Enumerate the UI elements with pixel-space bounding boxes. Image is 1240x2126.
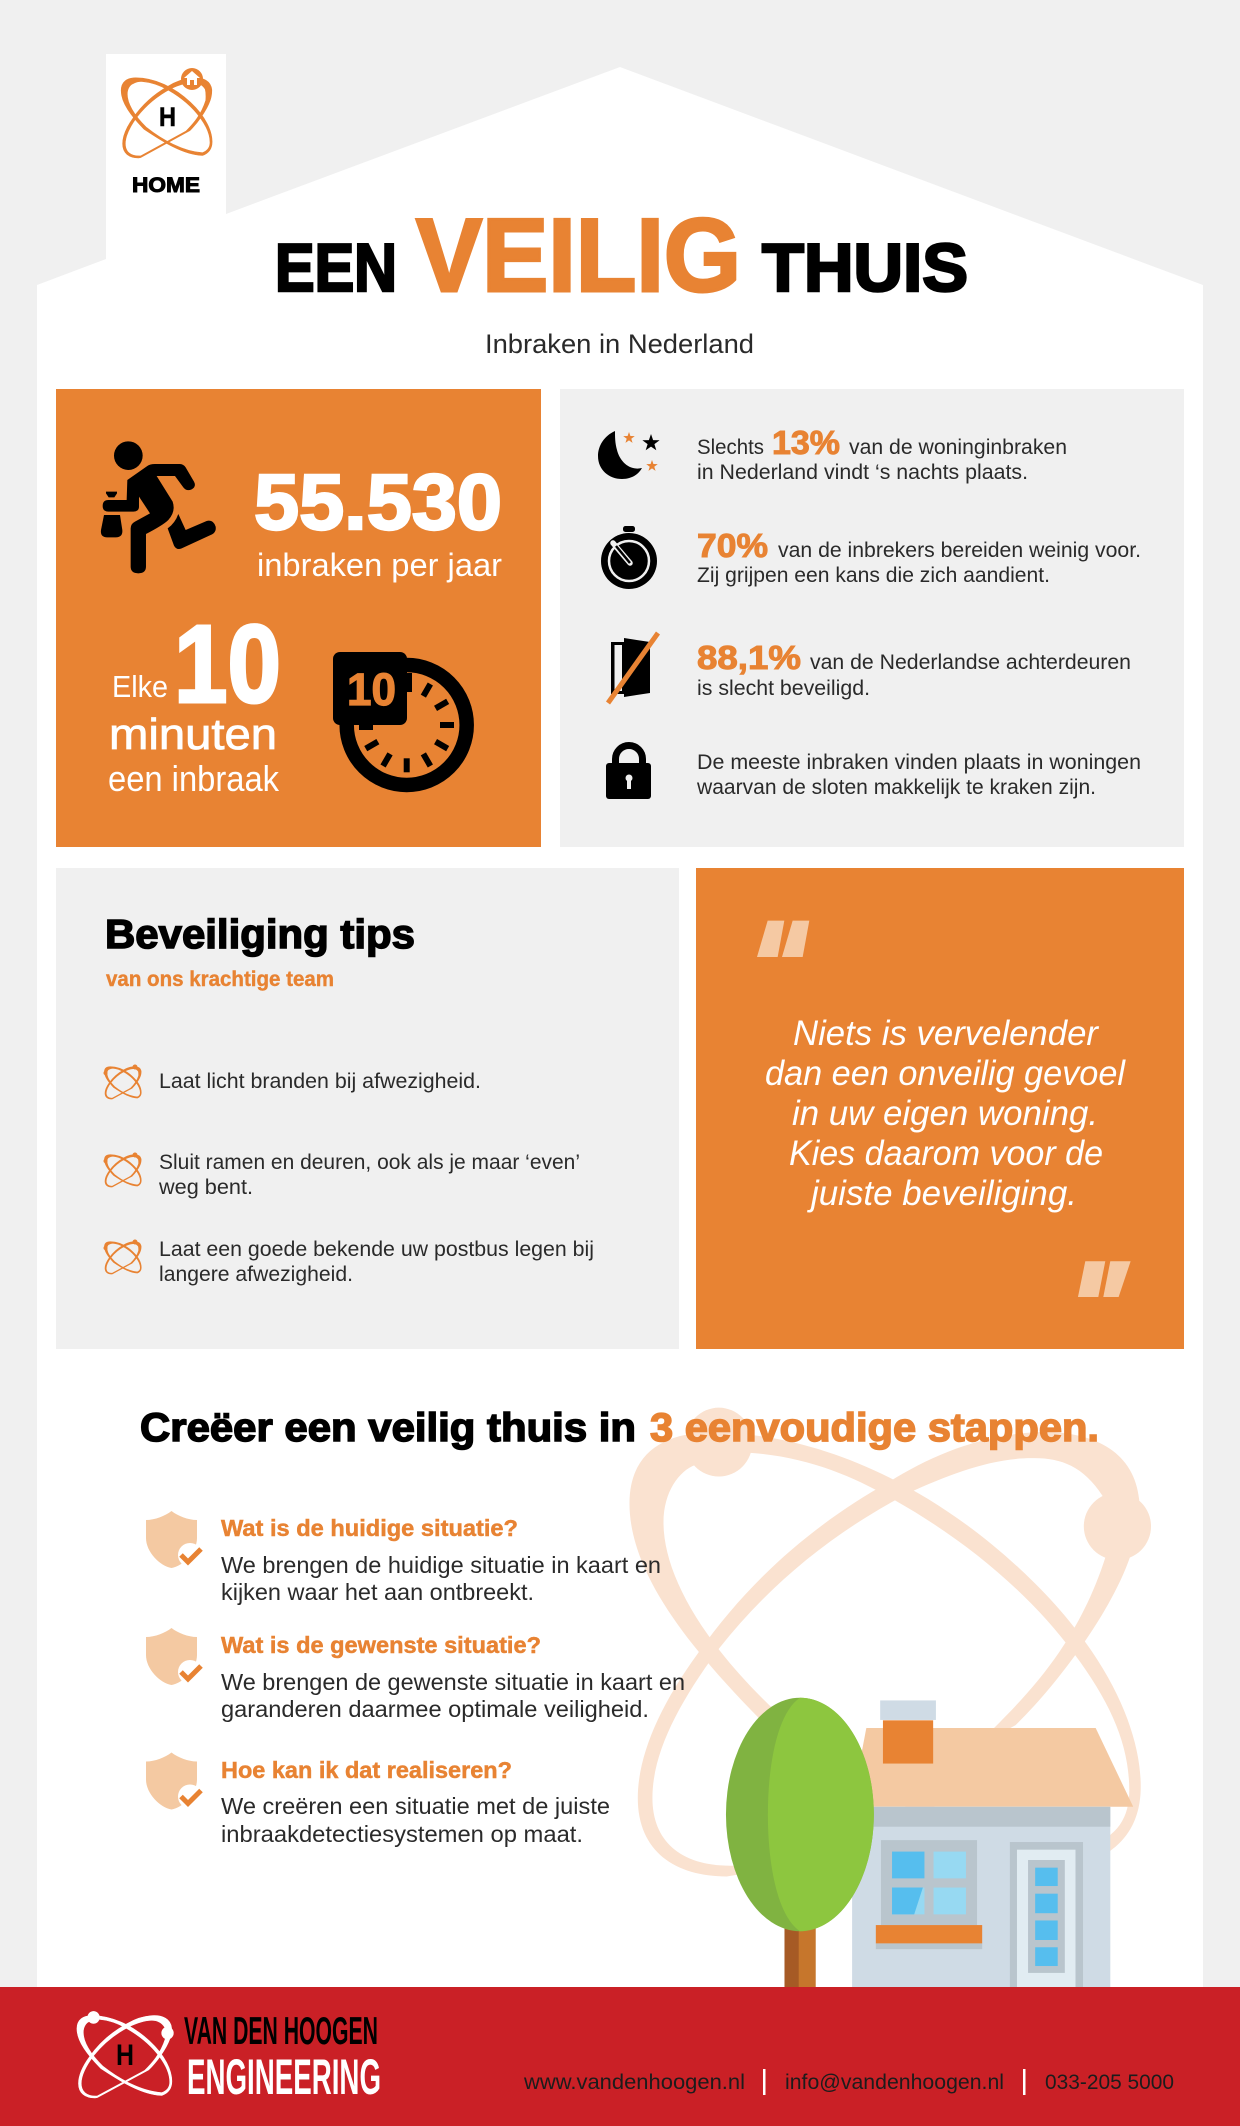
tip 1: Laat licht branden bij afwezigheid. [159, 1070, 481, 1093]
illustration: house and tree [726, 1698, 1133, 1987]
fact: 88,1%: 88,1% [697, 639, 801, 676]
icon: crossed-out door [608, 633, 658, 703]
icon: closing quote [1078, 1261, 1131, 1297]
logo: van den hoogen engineering [77, 2010, 381, 2105]
icon: shield check [146, 1628, 202, 1685]
logo: van den hoogen engineering: VAN DEN HOOGEN [184, 2010, 378, 2053]
tip 3 [159, 1238, 594, 1286]
step 3: Hoe kan ik dat realiseren? [221, 1757, 512, 1783]
stat: elke 10 minuten: minuten [109, 710, 277, 759]
logo: van den hoogen engineering: ENGINEERING [187, 2049, 381, 2105]
icon: moon and stars [598, 431, 660, 479]
tip 2 [158, 1151, 580, 1199]
tip 3: Laat een goede bekende uw postbus legen bij [159, 1238, 594, 1261]
illustration: large pale atom [629, 1408, 1151, 1876]
panel: orange statistics [56, 389, 541, 847]
fact: 70%: van de inbrekers bereiden weinig voor. [778, 539, 1141, 562]
fact: 13%: 13% [772, 424, 840, 461]
fact: 13%: Slechts [697, 436, 764, 459]
heading: beveiliging tips: Beveiliging tips [105, 911, 415, 957]
quote text: dan een onveilig gevoel [765, 1054, 1126, 1093]
subtitle: Inbraken in Nederland [485, 329, 754, 359]
fact: locks [696, 751, 1141, 799]
title: VEILIG [416, 197, 741, 313]
icon: shield check [146, 1752, 202, 1810]
step 1: Wat is de huidige situatie? [221, 1515, 518, 1541]
stat: elke 10 minuten: een inbraak [108, 758, 280, 799]
contact details: info@vandenhoogen.nl [785, 2071, 1004, 2094]
icon: clock with 10 [333, 652, 467, 785]
fact: 88,1%: is slecht beveiligd. [697, 677, 870, 700]
quote text: in uw eigen woning. [792, 1094, 1098, 1133]
house [851, 1700, 1133, 1987]
step 3: We creëren een situatie met de juiste [221, 1793, 610, 1819]
heading: three steps [140, 1406, 1099, 1450]
step 1: We brengen de huidige situatie in kaart en [221, 1552, 661, 1578]
fact: 70%: 70% [697, 527, 768, 564]
stat: elke 10 minuten [108, 603, 281, 799]
tip 3: langere afwezigheid. [159, 1263, 353, 1286]
logo: home [121, 68, 212, 197]
fact: 88,1%: van de Nederlandse achterdeuren [810, 651, 1131, 674]
step 2: garanderen daarmee optimale veiligheid. [221, 1696, 649, 1722]
tip 2: weg bent. [158, 1176, 253, 1199]
panel: facts [560, 389, 1184, 847]
icon: tip atom 1 [104, 1064, 141, 1099]
icon: padlock [606, 746, 651, 799]
fact: 70%: Zij grijpen een kans die zich aandient. [697, 564, 1050, 587]
stat: 55.530: 55.530 [254, 457, 502, 546]
step 2: We brengen de gewenste situatie in kaart en [221, 1669, 685, 1695]
quote text: Niets is vervelender [793, 1014, 1099, 1053]
step 2: Wat is de gewenste situatie? [221, 1632, 541, 1658]
icon: stopwatch [601, 526, 657, 589]
quote text: Kies daarom voor de [789, 1134, 1103, 1173]
logo: van den hoogen engineering: H [116, 2039, 134, 2072]
icon: running burglar [101, 441, 216, 573]
stat: elke 10 minuten: Elke [112, 669, 168, 704]
stat label: inbraken per jaar [257, 547, 502, 583]
tree [726, 1698, 874, 1987]
tip 2: Sluit ramen en deuren, ook als je maar ‘even’ [159, 1151, 580, 1174]
step 2 [146, 1628, 685, 1722]
logo: home: H [159, 102, 176, 132]
title: EEN [275, 231, 397, 306]
panel: security tips [56, 868, 679, 1349]
footer [0, 1987, 1240, 2126]
stat: elke 10 minuten: 10 [174, 603, 281, 726]
subheading: van ons krachtige team [106, 968, 334, 991]
icon: tip atom 3 [104, 1240, 141, 1274]
fact: 70% [697, 527, 1141, 587]
quote text [765, 1014, 1126, 1213]
fact: 13% [697, 424, 1067, 484]
contact details: www.vandenhoogen.nl [523, 2071, 745, 2094]
heading: three steps: Creëer een veilig thuis in [140, 1406, 636, 1450]
fact: 13%: van de woninginbraken [849, 436, 1067, 459]
fact: 88,1% [697, 639, 1131, 700]
quote text: juiste beveiliging. [807, 1174, 1077, 1213]
icon: opening quote [757, 921, 809, 957]
icon: clock with 10: 10 [347, 664, 396, 715]
panel: quote [696, 868, 1184, 1349]
step 1 [146, 1511, 661, 1605]
title [275, 197, 968, 313]
heading: three steps: 3 eenvoudige stappen. [650, 1406, 1099, 1450]
title: THUIS [762, 231, 968, 306]
step 1: kijken waar het aan ontbreekt. [221, 1579, 534, 1605]
step 3 [146, 1752, 610, 1847]
logo: home: HOME [132, 173, 200, 197]
fact: locks: De meeste inbraken vinden plaats in woningen [697, 751, 1141, 774]
contact details: 033-205 5000 [1045, 2071, 1174, 2094]
contact details [523, 2069, 1174, 2095]
fact: locks: waarvan de sloten makkelijk te kraken zijn. [696, 776, 1096, 799]
step 3: inbraakdetectiesystemen op maat. [221, 1821, 583, 1847]
icon: tip atom 2 [104, 1152, 141, 1187]
icon: shield check [146, 1511, 202, 1568]
fact: 13%: in Nederland vindt ‘s nachts plaats. [697, 461, 1028, 484]
